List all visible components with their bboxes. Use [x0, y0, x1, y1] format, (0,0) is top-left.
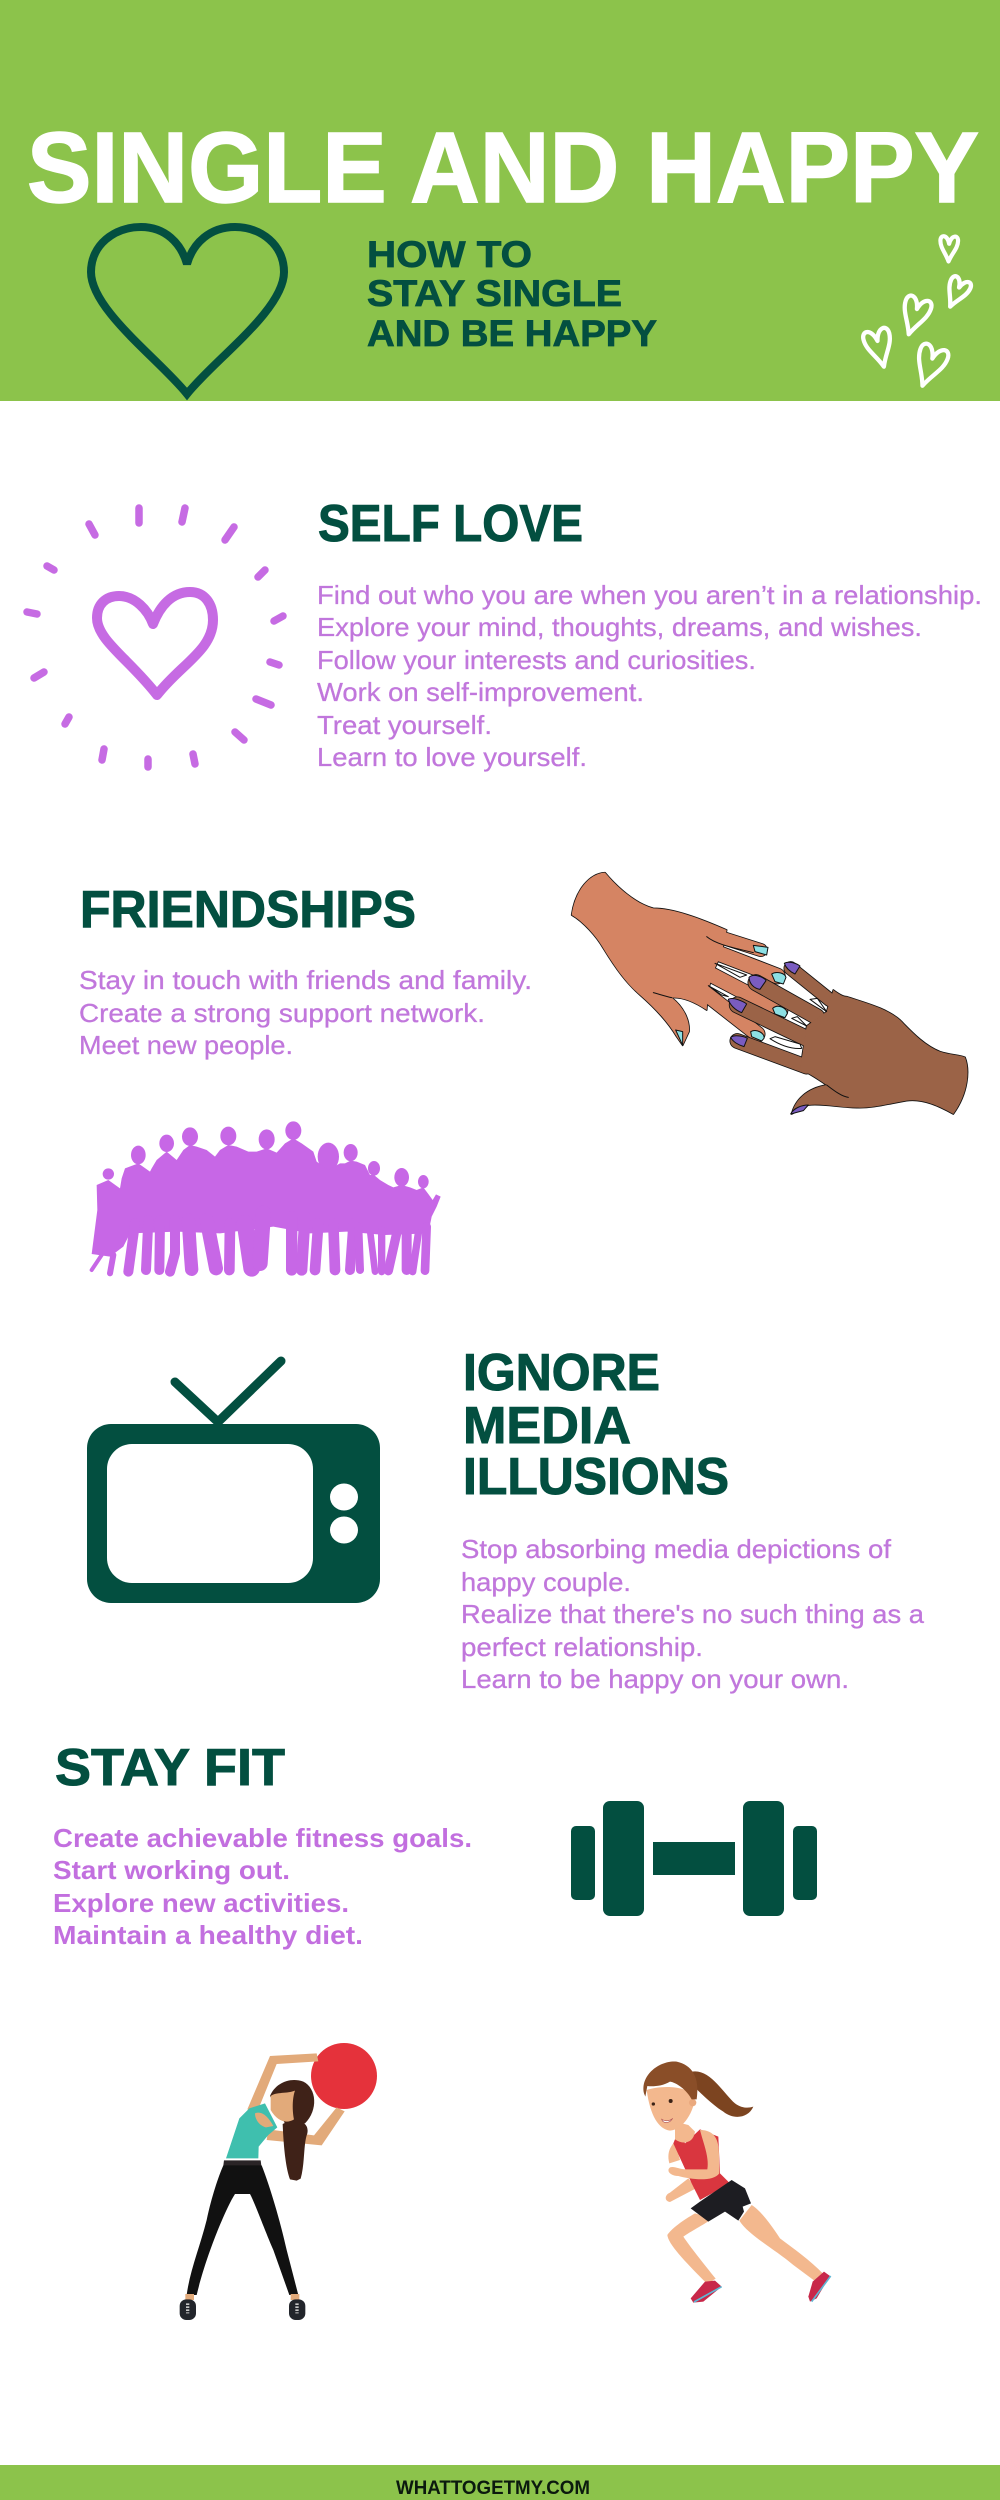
text block: media list: Learn to be happy on your own. — [461, 1664, 849, 1694]
subtitle — [367, 234, 657, 354]
subtitle: STAY SINGLE — [367, 273, 622, 314]
text block: media list: perfect relationship. — [461, 1632, 703, 1662]
panel: header banner — [0, 0, 1000, 401]
illustration: woman running — [643, 2062, 831, 2303]
text block: self love list: Explore your mind, thoughts, dreams, and wishes. — [317, 612, 922, 642]
panel: friendships — [79, 873, 968, 1273]
icon: small white hearts — [862, 236, 972, 391]
icon: large outline heart — [91, 227, 284, 394]
text block: self love list: Find out who you are when you aren’t in a relationship. — [317, 580, 982, 610]
icon: dumbbell — [571, 1801, 817, 1916]
subtitle: HOW TO — [367, 234, 532, 275]
text block: self love list — [317, 580, 982, 772]
text block: self love list: Work on self-improvement. — [317, 677, 644, 707]
heading: stay fit: STAY FIT — [55, 1739, 285, 1797]
panel: ignore media illusions — [87, 1344, 925, 1694]
heading: self love: SELF LOVE — [318, 495, 583, 553]
icon: two hands touching — [572, 873, 968, 1114]
text block: fitness list: Explore new activities. — [53, 1888, 349, 1918]
heading: friendships: FRIENDSHIPS — [80, 881, 416, 939]
text block: friendships list: Create a strong support network. — [79, 998, 485, 1028]
footer bar — [0, 2465, 1000, 2500]
heading: ignore media illusions — [463, 1344, 729, 1506]
subtitle: AND BE HAPPY — [367, 313, 657, 354]
text block: friendships list: Meet new people. — [79, 1030, 293, 1060]
text block: self love list: Treat yourself. — [317, 710, 492, 740]
text block: media list — [461, 1534, 925, 1694]
text block: fitness list — [53, 1823, 472, 1950]
title: SINGLE AND HAPPY — [27, 112, 979, 224]
text block: fitness list: Create achievable fitness goals. — [53, 1823, 472, 1853]
panel: self love — [27, 495, 982, 772]
icon: television — [87, 1361, 380, 1603]
text block: media list: Stop absorbing media depictions of — [461, 1534, 892, 1564]
text block: self love list: Learn to love yourself. — [317, 742, 587, 772]
heading: ignore media illusions: IGNORE — [463, 1344, 660, 1402]
text block: fitness list: Maintain a healthy diet. — [53, 1920, 363, 1950]
text block: friendships list: Stay in touch with friends and family. — [79, 965, 532, 995]
footer text: WHATTOGETMY.COM — [396, 2478, 590, 2499]
text block: fitness list: Start working out. — [53, 1855, 290, 1885]
icon: heart with rays — [27, 508, 283, 767]
heading: ignore media illusions: ILLUSIONS — [463, 1448, 729, 1506]
text block: media list: happy couple. — [461, 1567, 631, 1597]
panel: stay fit — [53, 1739, 831, 2320]
text block: friendships list — [79, 965, 532, 1060]
illustration: woman stretching with ball — [180, 2043, 377, 2320]
text block: media list: Realize that there's no such thing as a — [461, 1599, 925, 1629]
icon: crowd silhouette — [92, 1121, 441, 1273]
heading: ignore media illusions: MEDIA — [463, 1397, 631, 1455]
text block: self love list: Follow your interests and curiosities. — [317, 645, 756, 675]
